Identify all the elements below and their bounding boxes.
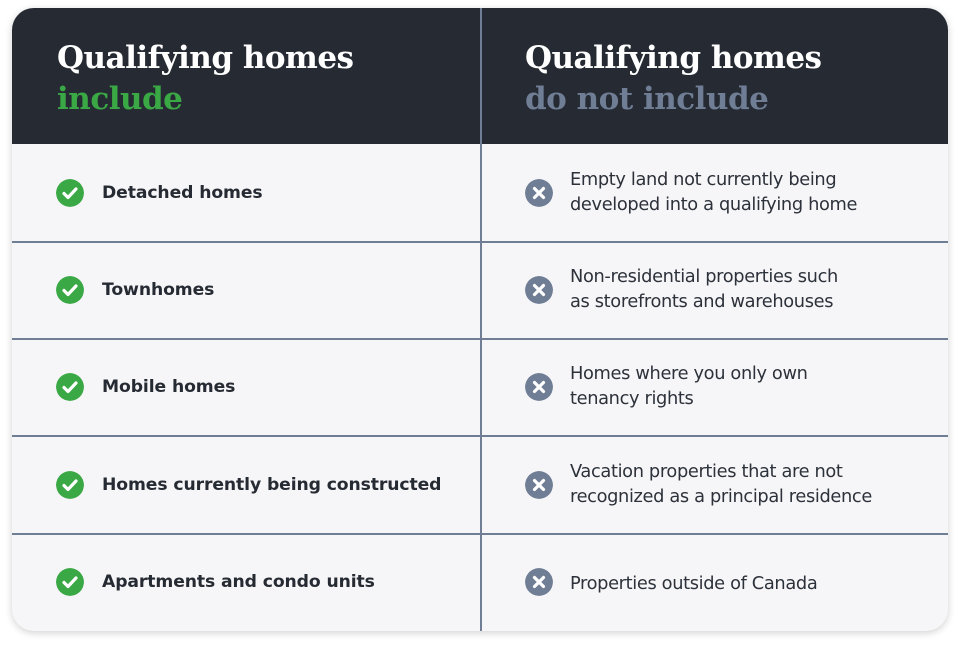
text bbox=[570, 169, 857, 215]
icon: check bbox=[56, 568, 84, 596]
icon: check bbox=[56, 373, 84, 401]
text bbox=[570, 461, 872, 507]
row 2 bbox=[56, 266, 838, 312]
text: tenancy rights bbox=[570, 388, 693, 409]
icon: x bbox=[525, 568, 553, 596]
row 1 bbox=[56, 169, 857, 215]
row 5 bbox=[56, 568, 817, 596]
heading: do not include: do not include bbox=[525, 81, 768, 117]
heading: include: include bbox=[57, 81, 182, 117]
text bbox=[570, 266, 838, 312]
text: Vacation properties that are not bbox=[570, 461, 843, 482]
text: Mobile homes bbox=[102, 377, 235, 397]
text: Homes currently being constructed bbox=[102, 475, 441, 495]
text: Properties outside of Canada bbox=[570, 573, 817, 594]
text: as storefronts and warehouses bbox=[570, 291, 833, 312]
text: Townhomes bbox=[102, 280, 214, 300]
icon: check bbox=[56, 179, 84, 207]
row 3 bbox=[56, 363, 808, 409]
heading: include bbox=[57, 40, 354, 117]
icon: check bbox=[56, 276, 84, 304]
text: developed into a qualifying home bbox=[570, 194, 857, 215]
text bbox=[570, 363, 808, 409]
heading: do not include bbox=[525, 40, 822, 117]
icon: x bbox=[525, 276, 553, 304]
icon: x bbox=[525, 373, 553, 401]
row 4 bbox=[56, 461, 872, 507]
heading: include: Qualifying homes bbox=[57, 40, 354, 76]
text: Apartments and condo units bbox=[102, 572, 375, 592]
icon: check bbox=[56, 471, 84, 499]
text: Non-residential properties such bbox=[570, 266, 838, 287]
text: Detached homes bbox=[102, 183, 263, 203]
header bbox=[12, 8, 948, 144]
text: Homes where you only own bbox=[570, 363, 808, 384]
text: Empty land not currently being bbox=[570, 169, 836, 190]
text: recognized as a principal residence bbox=[570, 486, 872, 507]
heading: do not include: Qualifying homes bbox=[525, 40, 822, 76]
icon: x bbox=[525, 179, 553, 207]
icon: x bbox=[525, 471, 553, 499]
